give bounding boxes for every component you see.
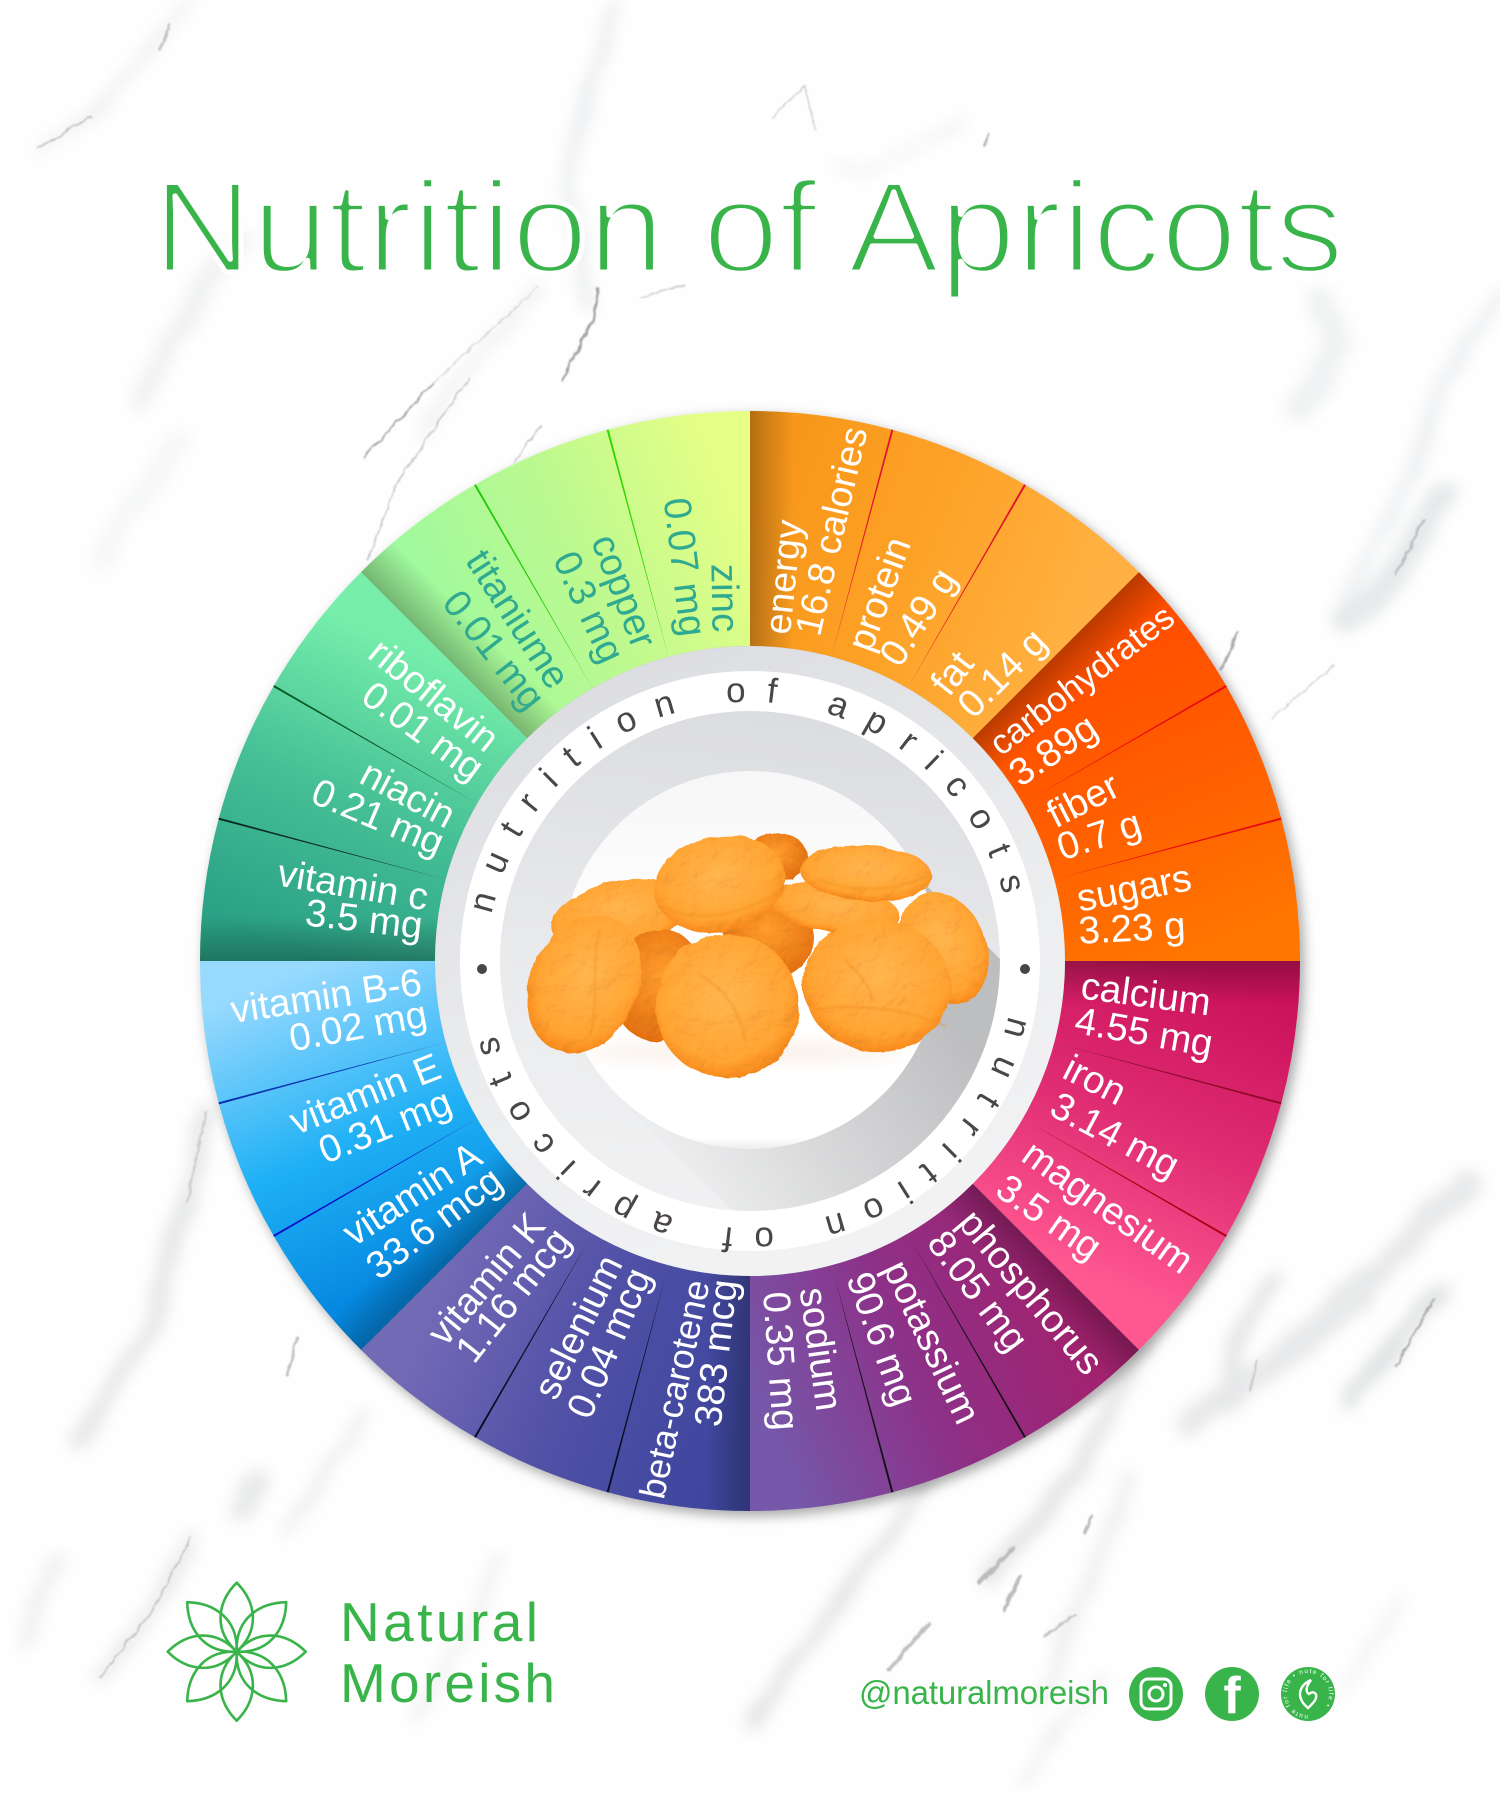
label: phosphorus: 8.05 mg	[919, 1223, 1037, 1360]
logo wordmark: Natural Moreish: Moreish	[340, 1652, 555, 1714]
label: carbohydrates: 3.89g	[1001, 706, 1105, 795]
panel: vitamin A, vitamin E, vitamin B-6	[86, 844, 592, 1350]
label: beta-carotene: beta-carotene	[631, 1276, 718, 1502]
panel: energy, protein, fat	[750, 411, 1139, 738]
label: vitamin A: 33.6 mcg	[358, 1159, 510, 1288]
panel: beta-carotene, selenium, vitamin K	[361, 1184, 750, 1511]
logo wordmark: Natural Moreish: Natural	[340, 1591, 538, 1653]
icon: facebook: f	[1223, 1667, 1241, 1725]
panel: titaniume, copper, zinc	[361, 297, 867, 803]
logo: flower mark	[168, 1583, 306, 1721]
nutrient wheel	[196, 408, 1312, 1524]
circular text: nutrition of apricots	[474, 678, 1030, 1252]
wheel drop shadow	[204, 416, 1304, 1516]
label: sugars: sugars	[1073, 856, 1195, 921]
label: protein	[839, 532, 966, 674]
label: calcium: 4.55 mg	[1072, 999, 1216, 1066]
panel: vitamin c, niacin, riboflavin	[200, 572, 527, 961]
label: zinc: 0.07 mg	[655, 495, 714, 639]
label: niacin: 0.21 mg	[305, 770, 450, 864]
label: sodium: 0.35 mg	[754, 1290, 807, 1432]
label: selenium: selenium	[525, 1249, 632, 1406]
circular text: nutrition of apricots: nutrition of apricots	[480, 1018, 1026, 1252]
long plate shadow	[708, 886, 1000, 1211]
label: fiber: fiber	[1040, 764, 1127, 837]
label: copper	[544, 529, 665, 670]
panel: carbohydrates, fiber, sugars	[908, 572, 1414, 1078]
center ring and plate	[435, 646, 1065, 1276]
label: vitamin E: 0.31 mg	[313, 1080, 458, 1172]
label: riboflavin: riboflavin	[360, 630, 507, 761]
label: niacin: niacin	[353, 752, 462, 837]
label: sodium: sodium	[791, 1285, 850, 1414]
label: zinc	[655, 495, 747, 639]
label: protein: 0.49 g	[871, 561, 966, 674]
apricots photo illustration	[505, 823, 1005, 1098]
label: potassium: potassium	[874, 1254, 989, 1431]
label: magnesium: 3.5 mg	[988, 1166, 1109, 1269]
label: selenium: 0.04 mcg	[559, 1262, 660, 1424]
label: vitamin c: 3.5 mg	[303, 891, 425, 948]
label: magnesium: magnesium	[1014, 1132, 1201, 1283]
label: protein: protein	[839, 532, 920, 657]
label: vitamin K: vitamin K	[419, 1205, 554, 1354]
label: copper: 0.3 mg	[544, 545, 633, 670]
label: fat: 0.14 g	[949, 620, 1055, 726]
icon: instagram	[1129, 1667, 1183, 1721]
label: titaniume: 0.01 mg	[434, 582, 553, 718]
label: fiber	[1040, 764, 1147, 869]
label: energy: 16.8 calories	[787, 423, 875, 639]
label: vitamin B-6: vitamin B-6	[228, 961, 424, 1032]
label: riboflavin: 0.01 mg	[354, 673, 492, 790]
label: iron: 3.14 mg	[1043, 1084, 1186, 1187]
title: Nutrition of Apricots	[153, 154, 1344, 300]
label: vitamin B-6	[228, 961, 430, 1060]
label: sodium	[754, 1285, 850, 1432]
logo wordmark: Natural Moreish	[340, 1591, 555, 1714]
label: beta-carotene: 383 mcg	[687, 1277, 746, 1429]
label: copper: copper	[582, 529, 665, 654]
label: vitamin K: 1.16 mcg	[447, 1220, 580, 1371]
label: calcium: calcium	[1078, 965, 1213, 1024]
label: vitamin B-6: 0.02 mg	[286, 993, 430, 1060]
label: zinc: zinc	[702, 563, 747, 633]
label: sugars	[1073, 856, 1195, 953]
panel: calcium, iron, magnesium	[973, 961, 1300, 1350]
white plate	[561, 771, 939, 1149]
label: carbohydrates: carbohydrates	[982, 597, 1182, 763]
label: sugars: 3.23 g	[1077, 904, 1187, 953]
label: calcium	[1072, 965, 1216, 1066]
label: fiber: 0.7 g	[1052, 802, 1147, 869]
circular text: nutrition of apricots: nutrition of apricots	[474, 678, 1020, 912]
label: energy: energy	[756, 518, 810, 636]
label: iron: iron	[1056, 1047, 1133, 1114]
label: potassium: 90.6 mg	[838, 1266, 926, 1412]
social handle: @naturalmoreish	[859, 1674, 1109, 1711]
label: titaniume: titaniume	[457, 542, 578, 696]
label: phosphorus: phosphorus	[949, 1201, 1112, 1383]
label: vitamin A: vitamin A	[335, 1134, 490, 1255]
label: vitamin c: vitamin c	[274, 852, 431, 919]
label: vitamin E: vitamin E	[284, 1045, 447, 1143]
icon: facebook	[1205, 1667, 1259, 1725]
icon: nuts for life badge: nute for life • nute for life •	[1282, 1668, 1334, 1718]
label: fat: fat	[922, 643, 983, 703]
panel: phosphorus, potassium, sodium	[633, 1119, 1139, 1625]
